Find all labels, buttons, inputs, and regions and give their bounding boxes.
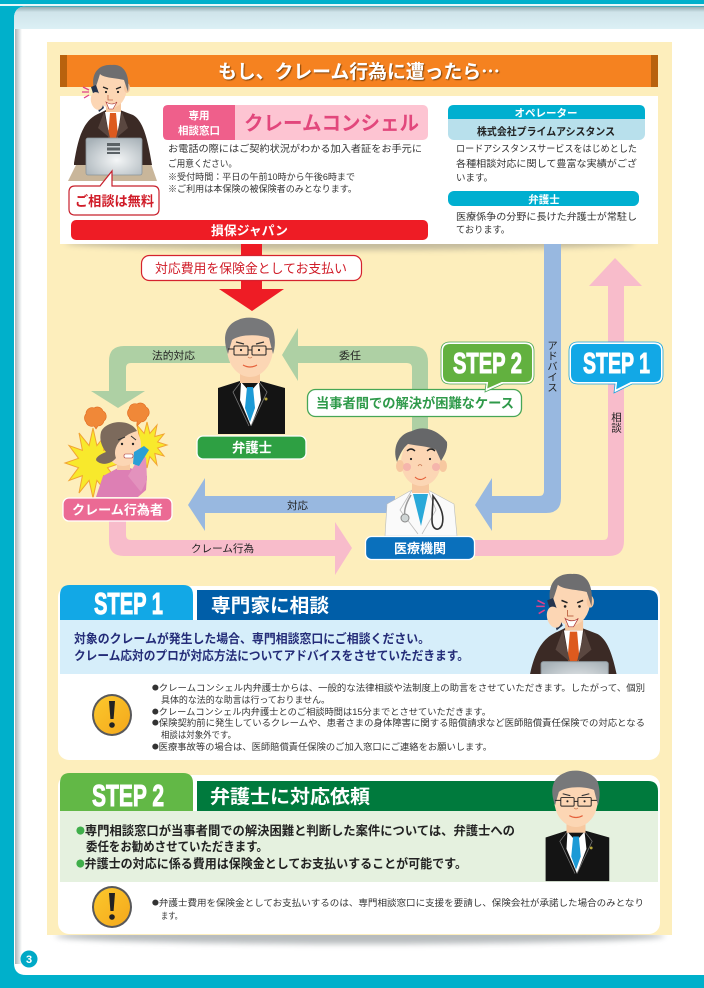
operator block (448, 105, 645, 184)
step 1 notes: ●医療事故等の場合は、医師賠償責任保険のご加入窓口にご連絡をお願いします。 (152, 741, 492, 752)
payment callout: 対応費用を保険金としてお支払い (155, 261, 347, 276)
step 2 summary: ●専門相談窓口が当事者間での解決困難と判断した案件については、弁護士への (76, 823, 515, 838)
step 1 summary: 対象のクレームが発生した場合、専門相談窓口にご相談ください。 (74, 631, 430, 646)
consultation notes: お電話の際にはご契約状況がわかる加入者証をお手元に (168, 143, 422, 155)
arrow: claim action (109, 518, 352, 575)
step 2 badge (441, 342, 534, 392)
Sompo Japan bar: 損保ジャパン (211, 223, 288, 238)
lawyer block: ております。 (456, 225, 510, 236)
step 1 heading: STEP 1 (94, 586, 163, 621)
step 1 heading: 専門家に相談 (211, 595, 329, 617)
step 1 notes (152, 682, 645, 752)
panel: step 1 (58, 574, 660, 760)
doctor illustration (385, 428, 457, 536)
lawyer illustration (546, 771, 609, 881)
step 2 badge: STEP 2 (453, 348, 522, 380)
step 1 notes: ●クレームコンシェル内弁護士とのご相談時間は15分までとさせていただきます。 (152, 706, 491, 717)
step 2 heading: 弁護士に対応依頼 (210, 785, 370, 808)
operator block: ロードアシスタンスサービスをはじめとした (456, 144, 637, 155)
Sompo Japan bar (71, 220, 428, 240)
call center operator illustration (68, 65, 157, 181)
lawyer label (197, 436, 306, 459)
arrow: advice: アドバイス (546, 340, 558, 392)
arrow: response to claimant (188, 478, 395, 531)
arrow: response to claimant: 対応 (287, 499, 308, 512)
step 2 notes: ●弁護士費用を保険金としてお支払いするのは、専門相談窓口に支援を要請し、保険会社が承諾した場合のみとなり (152, 897, 644, 908)
claimant label (63, 498, 172, 521)
dedicated consultation window label (163, 105, 428, 140)
step 1 notes: ●クレームコンシェル内弁護士からは、一般的な法律相談や法制度上の助言をさせていただきます。したがって、個別 (152, 682, 645, 693)
arrow: consultation: 相談 (610, 411, 622, 434)
title banner (60, 55, 658, 87)
step 2 notes (152, 897, 644, 921)
claimant illustration (65, 403, 167, 498)
arrow: delegation (282, 328, 428, 432)
step 1 badge (569, 342, 663, 393)
operator block: 株式会社プライムアシスタンス (477, 125, 615, 138)
arrow: consultation (470, 258, 642, 556)
dedicated consultation window label: 相談窓口 (178, 124, 220, 137)
arrow: advice (475, 244, 561, 531)
payment callout (142, 256, 362, 280)
step 1 badge: STEP 1 (583, 348, 650, 380)
operator illustration (530, 574, 616, 674)
step 2 summary: ●弁護士の対応に係る費用は保険金としてお支払いすることが可能です。 (76, 856, 467, 871)
step 1 notes: ●保険契約前に発生しているクレームや、患者さまの身体障害に関する賠償請求など医師賠償責任保険での対応となる (152, 717, 645, 728)
step 2 summary (60, 811, 658, 882)
step 1 notes: 相談は対象外です。 (161, 729, 236, 740)
medical institution label: 医療機関 (394, 541, 446, 556)
operator block: 各種相談対応に関して豊富な実績がござ (456, 158, 637, 170)
step 1 summary (60, 620, 658, 674)
step 2 summary: 委任をお勧めさせていただきます。 (86, 839, 268, 854)
medical institution label (366, 536, 474, 560)
claimant label: クレーム行為者 (72, 502, 163, 518)
consultation notes: ※ご利用は本保険の被保険者のみとなります。 (168, 183, 357, 194)
arrow: legal response (91, 346, 230, 408)
lawyer block: 医療係争の分野に長けた弁護士が常駐し (456, 211, 637, 223)
lawyer label: 弁護士 (232, 440, 272, 456)
operator block: オペレーター (514, 108, 578, 120)
arrow: legal response: 法的対応 (152, 349, 196, 362)
arrow: claim action: クレーム行為 (191, 542, 254, 555)
consultation notes: ご用意ください。 (168, 158, 237, 170)
page number (20, 950, 38, 968)
arrow: delegation: 委任 (339, 349, 362, 362)
consultation notes (168, 143, 422, 194)
title banner: もし、クレーム行為に遭ったら… (218, 57, 500, 84)
step 1 notes: 具体的な法的な助言は行っておりません。 (161, 694, 330, 705)
consultation notes: ※受付時間：平日の午前10時から午後6時まで (168, 171, 355, 182)
arrow: insurance payment (219, 244, 284, 311)
free consultation callout (69, 171, 159, 215)
difficult case callout (308, 390, 522, 416)
step 1 heading (60, 585, 658, 621)
dedicated consultation window label: クレームコンシェル (244, 112, 419, 135)
information panel (60, 65, 658, 250)
difficult case callout: 当事者間での解決が困難なケース (316, 395, 514, 411)
lawyer block: 弁護士 (528, 193, 560, 206)
panel: step 2 (58, 771, 660, 934)
step 2 notes: ます。 (161, 911, 182, 921)
operator block: います。 (456, 173, 493, 184)
step 1 summary: クレーム応対のプロが対応方法についてアドバイスをさせていただきます。 (74, 648, 469, 663)
lawyer illustration (218, 318, 285, 434)
step 2 heading (60, 773, 658, 813)
page number: 3 (26, 954, 32, 966)
icon: warning (92, 694, 132, 736)
step 2 heading: STEP 2 (92, 778, 164, 813)
lawyer block (448, 191, 639, 236)
icon: warning (92, 886, 132, 928)
dedicated consultation window label: 専用 (188, 109, 210, 122)
free consultation callout: ご相談は無料 (75, 193, 154, 209)
